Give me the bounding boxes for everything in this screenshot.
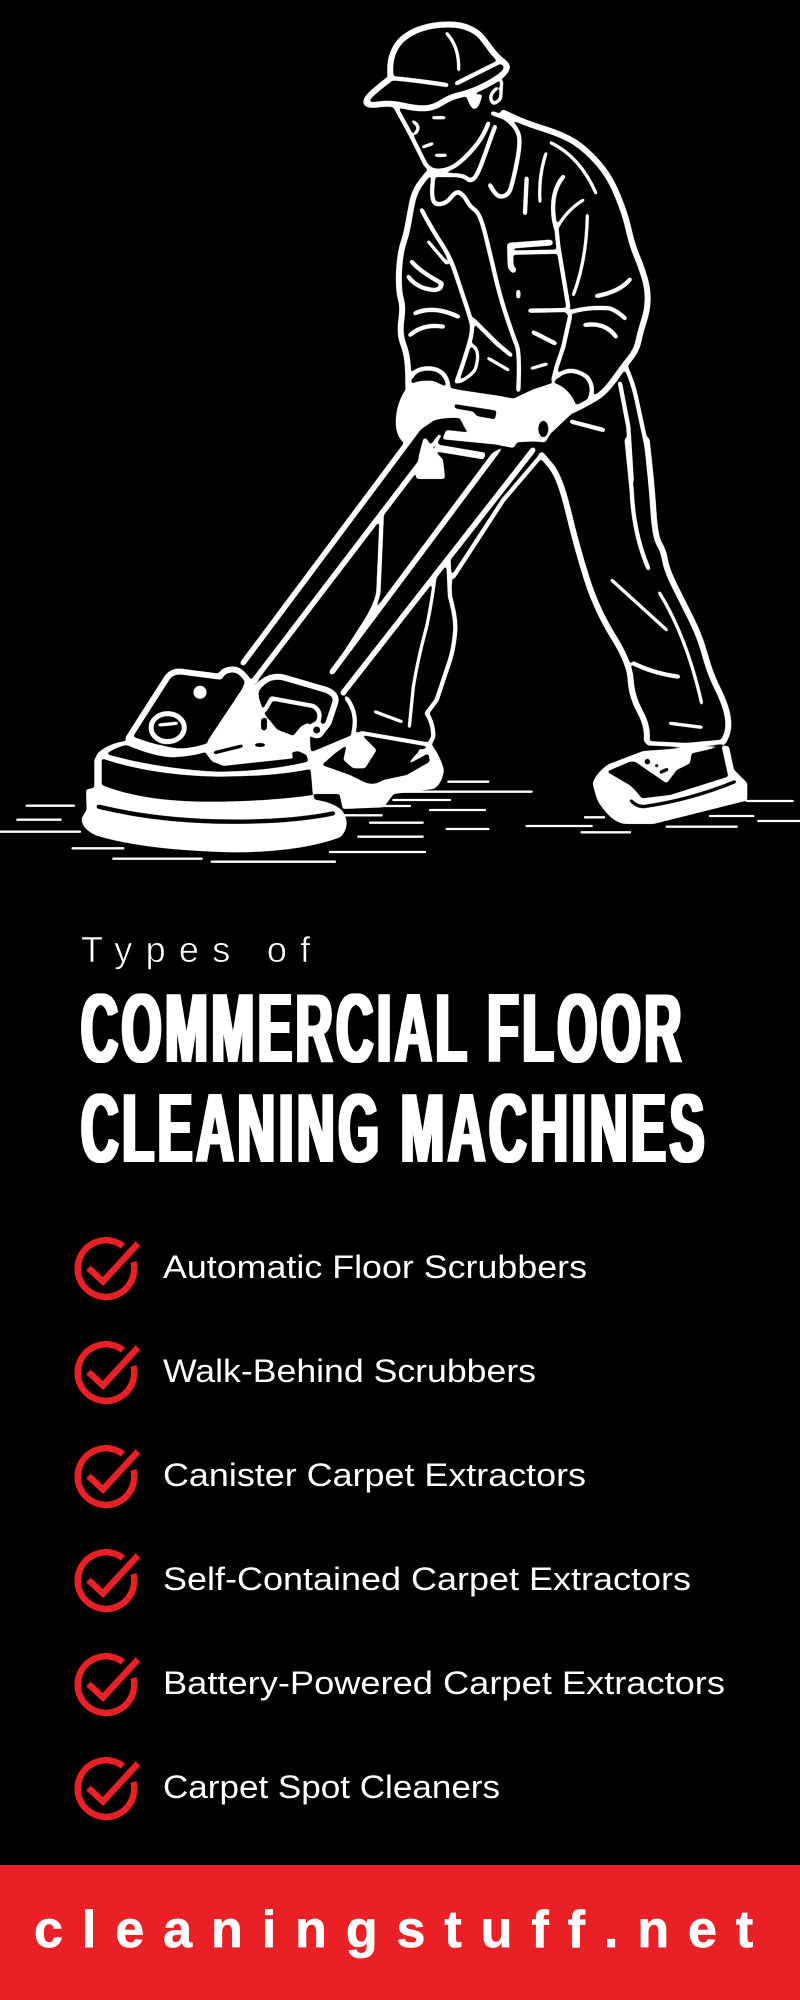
item: Self-Contained Carpet Extractors: [78, 1552, 691, 1609]
footer band: [0, 1865, 800, 2000]
right trouser leg: [542, 440, 728, 745]
floor streaks: [0, 782, 800, 862]
machine handle poles: [243, 430, 533, 693]
item: Walk-Behind Scrubbers: [78, 1344, 536, 1401]
item: Battery-Powered Carpet Extractors: [78, 1656, 725, 1713]
checklist: [78, 1240, 725, 1817]
machine base: [82, 737, 346, 852]
right shoe: [593, 747, 747, 823]
item: Canister Carpet Extractors: Canister Carpet Extractors: [163, 1457, 586, 1493]
item: Walk-Behind Scrubbers: Walk-Behind Scrubbers: [163, 1353, 536, 1389]
left trouser leg: [337, 517, 455, 743]
machine grip: [255, 677, 336, 750]
item: Automatic Floor Scrubbers: [78, 1240, 587, 1297]
item: Automatic Floor Scrubbers: Automatic Floor Scrubbers: [163, 1249, 587, 1285]
cap: [366, 24, 507, 108]
floor machine: [82, 517, 455, 852]
item: Carpet Spot Cleaners: Carpet Spot Cleaners: [163, 1769, 500, 1805]
machine housing: [128, 669, 300, 762]
leg edge by handle: [453, 455, 542, 577]
gloves and handle grip: [396, 381, 603, 460]
subtitle: Types of: [81, 929, 323, 970]
handle wedge: [418, 440, 443, 477]
illustration: worker operating floor machine: [0, 0, 800, 900]
left shoe: [310, 732, 443, 808]
item: Battery-Powered Carpet Extractors: Battery-Powered Carpet Extractors: [163, 1665, 725, 1701]
heading: [81, 973, 708, 1183]
face: [395, 82, 502, 171]
footer url: cleaningstuff.net: [34, 1901, 772, 1959]
worker upper body: [366, 24, 652, 480]
inner left leg stub: [448, 560, 450, 583]
item: Self-Contained Carpet Extractors: Self-Contained Carpet Extractors: [163, 1561, 691, 1597]
right leg and shoe: [448, 440, 747, 823]
jacket and collar: [399, 113, 652, 480]
item: Canister Carpet Extractors: [78, 1448, 586, 1505]
item: Carpet Spot Cleaners: [78, 1760, 500, 1817]
